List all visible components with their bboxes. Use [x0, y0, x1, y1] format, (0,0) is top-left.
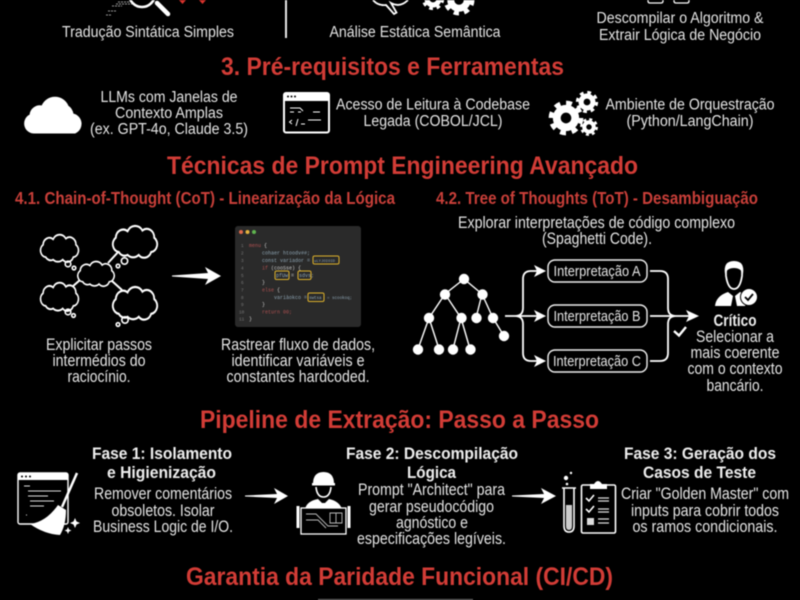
text: phase 2: especificações legíveis.	[357, 530, 506, 548]
pill: interpretation B	[548, 305, 647, 327]
code editor window: swtsa	[309, 297, 322, 301]
icon: magnifier over code	[106, 0, 206, 15]
code editor window: 4	[241, 266, 244, 272]
code editor window: }	[249, 316, 252, 322]
code editor window: 7	[241, 288, 244, 294]
text: critic	[688, 311, 782, 395]
text: critic: mais coerente	[690, 344, 780, 362]
heading: advanced prompt engineering: Técnicas de Prompt Engineering Avançado	[167, 152, 638, 180]
code editor window: }	[262, 302, 265, 308]
pill: interpretation C: Interpretação C	[553, 353, 641, 370]
text: phase 1: e Higienização	[107, 463, 216, 482]
arrow: phase 1 to 2	[245, 488, 288, 504]
code editor window: 6	[241, 281, 244, 286]
icon: cloud	[25, 97, 81, 133]
code editor window: menu {	[249, 243, 267, 249]
text: trace data flow: constantes hardcoded.	[226, 368, 370, 386]
icon: window and broom	[18, 473, 80, 535]
panel: phase 3	[562, 444, 789, 536]
text: critic: Selecionar a	[696, 328, 774, 346]
icon: test tube	[562, 472, 576, 532]
heading: pipeline: Pipeline de Extração: Passo a Passo	[200, 406, 599, 434]
divider: column separator	[285, 0, 287, 38]
icon: critic person	[715, 261, 758, 306]
text: orchestration environment: (Python/LangChain)	[626, 113, 754, 130]
code editor window: cohaer htoodv##;	[262, 250, 310, 256]
text: critic: bancário.	[706, 377, 764, 395]
text: phase 1: Business Logic de I/O.	[93, 518, 233, 536]
arrow: phase 2 to 3	[512, 488, 556, 504]
text: trace data flow: identificar variáveis e	[232, 352, 364, 370]
text: explicit steps: intermédios do	[52, 352, 146, 370]
text: explicit steps	[46, 336, 152, 386]
bottom panel edge	[318, 599, 473, 600]
code editor window: 8	[241, 296, 244, 301]
text: orchestration environment: Ambiente de Orquestração	[606, 96, 774, 114]
code editor window: 11	[239, 318, 245, 322]
code editor window: if (cooSse) {	[262, 266, 301, 272]
pill: interpretation C	[548, 350, 647, 372]
heading: 4.1: 4.1. Chain-of-Thought (CoT) - Linearização da Lógica	[15, 188, 395, 208]
code editor window: pfUw =	[276, 273, 294, 279]
text: codebase access	[336, 96, 530, 130]
icon: head and gears	[373, 0, 472, 14]
code editor window: 5	[241, 274, 244, 279]
heading: 4.2: 4.2. Tree of Thoughts (ToT) - Desambiguação	[436, 188, 758, 208]
text: decompile the algorithm: Descompilar o Algoritmo &	[596, 10, 764, 27]
text: explicit steps: raciocínio.	[68, 368, 130, 386]
code editor window: const variador =	[262, 258, 310, 264]
icon: algorithm boxes	[648, 0, 689, 3]
code editor window	[235, 226, 361, 327]
text: phase 1: Remover comentários	[94, 485, 232, 503]
text: critic: Crítico	[714, 311, 756, 330]
code editor window: return 00;	[262, 310, 292, 316]
code editor window: 1	[241, 244, 244, 249]
pill: interpretation B: Interpretação B	[554, 308, 640, 325]
code editor window: 10	[239, 310, 245, 316]
text: phase 2: agnóstico e	[396, 514, 468, 532]
text: explore interpretations: (Spaghetti Code).	[542, 230, 652, 248]
text: phase 1: Fase 1: Isolamento	[92, 444, 232, 463]
code editor window: variàokco =	[274, 295, 307, 301]
panel: phase 2	[298, 444, 518, 548]
panel: tree of thoughts	[413, 188, 782, 395]
code editor window: 3	[241, 259, 244, 264]
code editor window: = scookoq;	[327, 296, 352, 301]
code editor window: 9	[241, 303, 244, 308]
text: phase 2: Lógica	[407, 463, 457, 482]
pill: interpretation A: Interpretação A	[554, 263, 640, 280]
text: phase 1	[92, 444, 233, 536]
text: phase 2: Prompt "Architect" para	[358, 481, 505, 499]
text: phase 2	[346, 444, 518, 548]
icon: thought clouds	[41, 226, 157, 326]
text: phase 1: obsoletos. Isolar	[112, 502, 215, 520]
text: LLMs: (ex. GPT-4o, Claude 3.5)	[90, 121, 248, 138]
heading: prerequisites: 3. Pré-requisitos e Ferramentas	[221, 53, 564, 81]
panel: prerequisites row	[25, 89, 774, 138]
code editor window: sdvs;	[299, 273, 314, 279]
text: phase 3: Casos de Teste	[643, 463, 756, 482]
arrows: branching paths	[505, 265, 699, 367]
text: codebase access: Legada (COBOL/JCL)	[364, 113, 502, 130]
text: explicit steps: Explicitar passos	[46, 336, 152, 354]
text: simple syntactic translation: Tradução Sintática Simples	[62, 24, 234, 41]
text: decompile the algorithm: Extrair Lógica de Negócio	[599, 27, 761, 44]
icon: engineer with blueprint	[298, 472, 349, 534]
panel: top comparison row	[62, 0, 764, 44]
text: phase 2: gerar pseudocódigo	[369, 498, 494, 516]
text: phase 3: os ramos condicionais.	[632, 518, 778, 536]
text: phase 2: Fase 2: Descompilação	[346, 444, 518, 463]
text: critic: com o contexto	[688, 360, 782, 378]
heading: functional parity: Garantia da Paridade Funcional (CI/CD)	[186, 563, 613, 591]
text: explore interpretations: Explorar interpretações de código complexo	[458, 214, 735, 232]
code editor window: }	[262, 280, 265, 286]
text: phase 3: inputs para cobrir todos	[631, 502, 779, 520]
panel: phase 1	[18, 444, 233, 536]
text: orchestration environment	[606, 96, 774, 130]
text: LLMs: Contexto Amplas	[115, 105, 223, 122]
code editor window: uLYJOIOID	[314, 260, 336, 264]
code editor window: else {	[262, 288, 280, 294]
icon: tree	[413, 274, 509, 355]
text: trace data flow: Rastrear fluxo de dados,	[221, 336, 375, 354]
icon: code window	[284, 93, 329, 132]
text: LLMs: LLMs com Janelas de	[100, 89, 238, 106]
text: codebase access: Acesso de Leitura à Codebase	[336, 96, 530, 114]
text: phase 3: Fase 3: Geração dos	[624, 444, 776, 463]
icon: checklist clipboard	[582, 481, 616, 533]
text: decompile the algorithm	[596, 10, 764, 44]
text: static semantic analysis: Análise Estática Semântica	[330, 24, 501, 41]
text: trace data flow	[221, 336, 375, 386]
panel: chain of thought	[15, 188, 395, 386]
text: phase 3	[621, 444, 789, 536]
text: LLMs	[90, 89, 248, 138]
text: explore interpretations	[458, 214, 735, 248]
code editor window: 2	[241, 252, 244, 256]
arrow: thought to code	[172, 267, 221, 285]
pill: interpretation A	[548, 260, 647, 282]
icon: gears	[551, 92, 597, 135]
